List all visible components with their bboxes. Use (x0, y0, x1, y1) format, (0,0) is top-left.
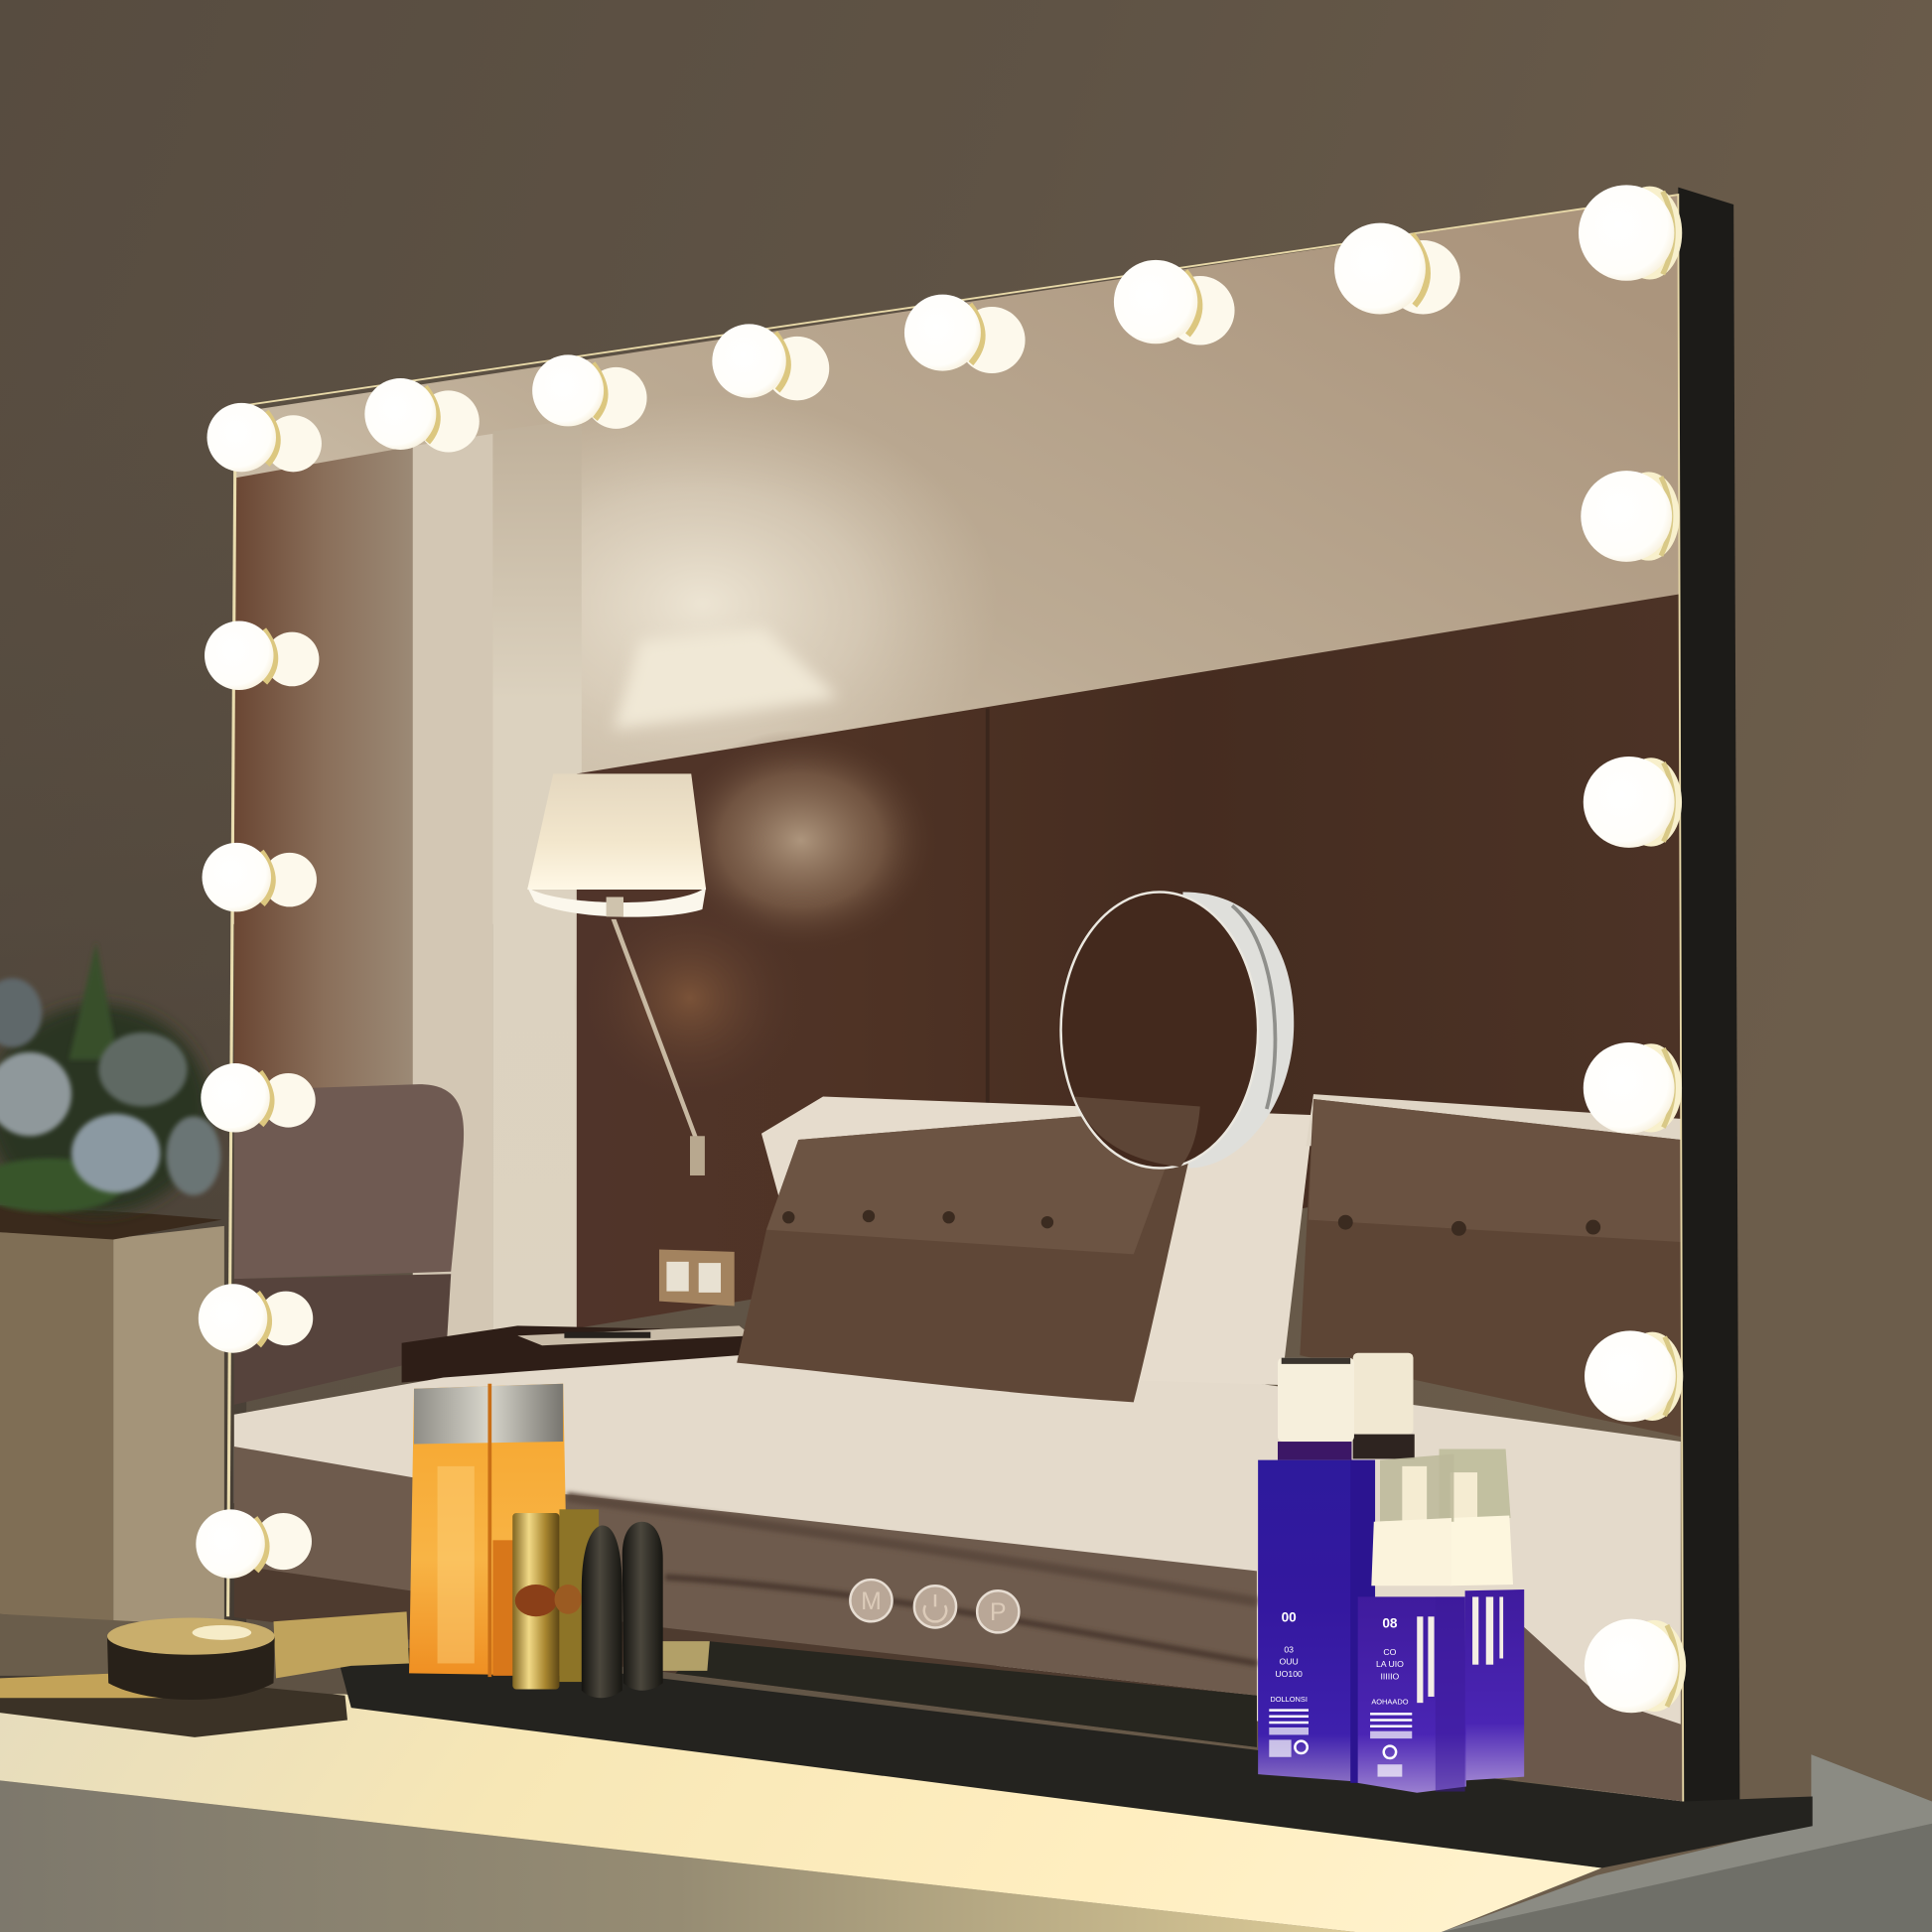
back pillow left (761, 1097, 1313, 1385)
foliage (0, 942, 220, 1213)
detachable magnifying mirror (1061, 893, 1294, 1169)
button power (914, 1586, 956, 1627)
mirror shelf reflection (675, 1641, 1257, 1747)
bulb: top row 3 (532, 354, 647, 429)
black lipstick 2 (622, 1522, 663, 1691)
bulb: top row 7 (1334, 223, 1460, 314)
bulb: right 1 (1581, 471, 1680, 562)
black lipstick 1 (582, 1525, 622, 1698)
bulb: right 2 (1584, 757, 1682, 848)
wall lamp (527, 773, 706, 1175)
bulb: top row 4 (712, 324, 829, 400)
bulb: top row 2 (364, 378, 480, 452)
button M: M (861, 1588, 882, 1615)
brown pillow left (737, 1106, 1201, 1402)
bulb: left 5 (196, 1509, 312, 1579)
front pump bottle (1358, 1453, 1466, 1793)
bulb: left 1 (205, 621, 319, 690)
wall switch plate (659, 1249, 735, 1307)
mirror edge highlight (236, 195, 1683, 1801)
bulb: right 4 (1585, 1330, 1683, 1422)
bulb: left 3 (201, 1063, 316, 1133)
bottle label: AOHAADO (1371, 1697, 1409, 1706)
armchair (234, 1084, 464, 1405)
purple bottles (1258, 1353, 1524, 1793)
small gold base (663, 1641, 710, 1671)
bulb: top row 6 (1114, 260, 1235, 345)
left edge light strip (228, 413, 235, 1616)
button P: P (990, 1599, 1007, 1626)
left wall strip (234, 446, 414, 1134)
bottle label: CO (1383, 1647, 1397, 1657)
gold lipstick (512, 1509, 599, 1690)
blanket (234, 1447, 1683, 1801)
mirror glass with bedroom reflection (221, 185, 1701, 1811)
white wall column (413, 419, 582, 1355)
bulb: top row 1 (207, 403, 322, 472)
desk surface (0, 1694, 1932, 1932)
compact case (107, 1618, 275, 1700)
bottle label: UO100 (1275, 1669, 1303, 1679)
bottle label: 08 (1382, 1615, 1398, 1630)
planter box (0, 1205, 228, 1676)
bottle label: 03 (1284, 1644, 1294, 1654)
brown pillow right (1300, 1099, 1681, 1437)
bottle label (1370, 1615, 1412, 1777)
left tall bottle (1258, 1358, 1375, 1783)
wood headboard wall (573, 594, 1681, 1328)
plant and planter (0, 942, 228, 1676)
orange cosmetic jars (409, 1384, 568, 1677)
bottle label: IIIIIO (1381, 1672, 1400, 1682)
bulb: right 5 (1585, 1619, 1686, 1713)
back pillow right (1307, 1094, 1681, 1146)
bottle label: 00 (1282, 1609, 1297, 1624)
bottle label: OUU (1280, 1657, 1299, 1667)
bulb: left 2 (203, 843, 317, 911)
rear cap (1353, 1353, 1415, 1458)
bottle label (1269, 1609, 1309, 1757)
button P (977, 1590, 1019, 1632)
bulb: left 4 (199, 1284, 313, 1353)
bed sheet (234, 1355, 1681, 1811)
mirror base (333, 1639, 1813, 1867)
bottle label: DOLLONSI (1270, 1695, 1308, 1704)
lipsticks (512, 1509, 710, 1698)
mirror black side frame (1678, 188, 1739, 1806)
touch buttons (850, 1580, 1019, 1632)
bulb: top row 5 (904, 295, 1026, 373)
bulb: right 3 (1584, 1042, 1682, 1134)
right pump bottle (1440, 1449, 1524, 1780)
ceiling reflection (221, 185, 1701, 924)
side table (402, 1325, 752, 1382)
bottle label: LA UIO (1376, 1659, 1404, 1669)
tray on desk (0, 1673, 347, 1737)
gold tablet (274, 1611, 409, 1678)
bulb: top right corner (1579, 185, 1682, 281)
button M (850, 1580, 893, 1621)
